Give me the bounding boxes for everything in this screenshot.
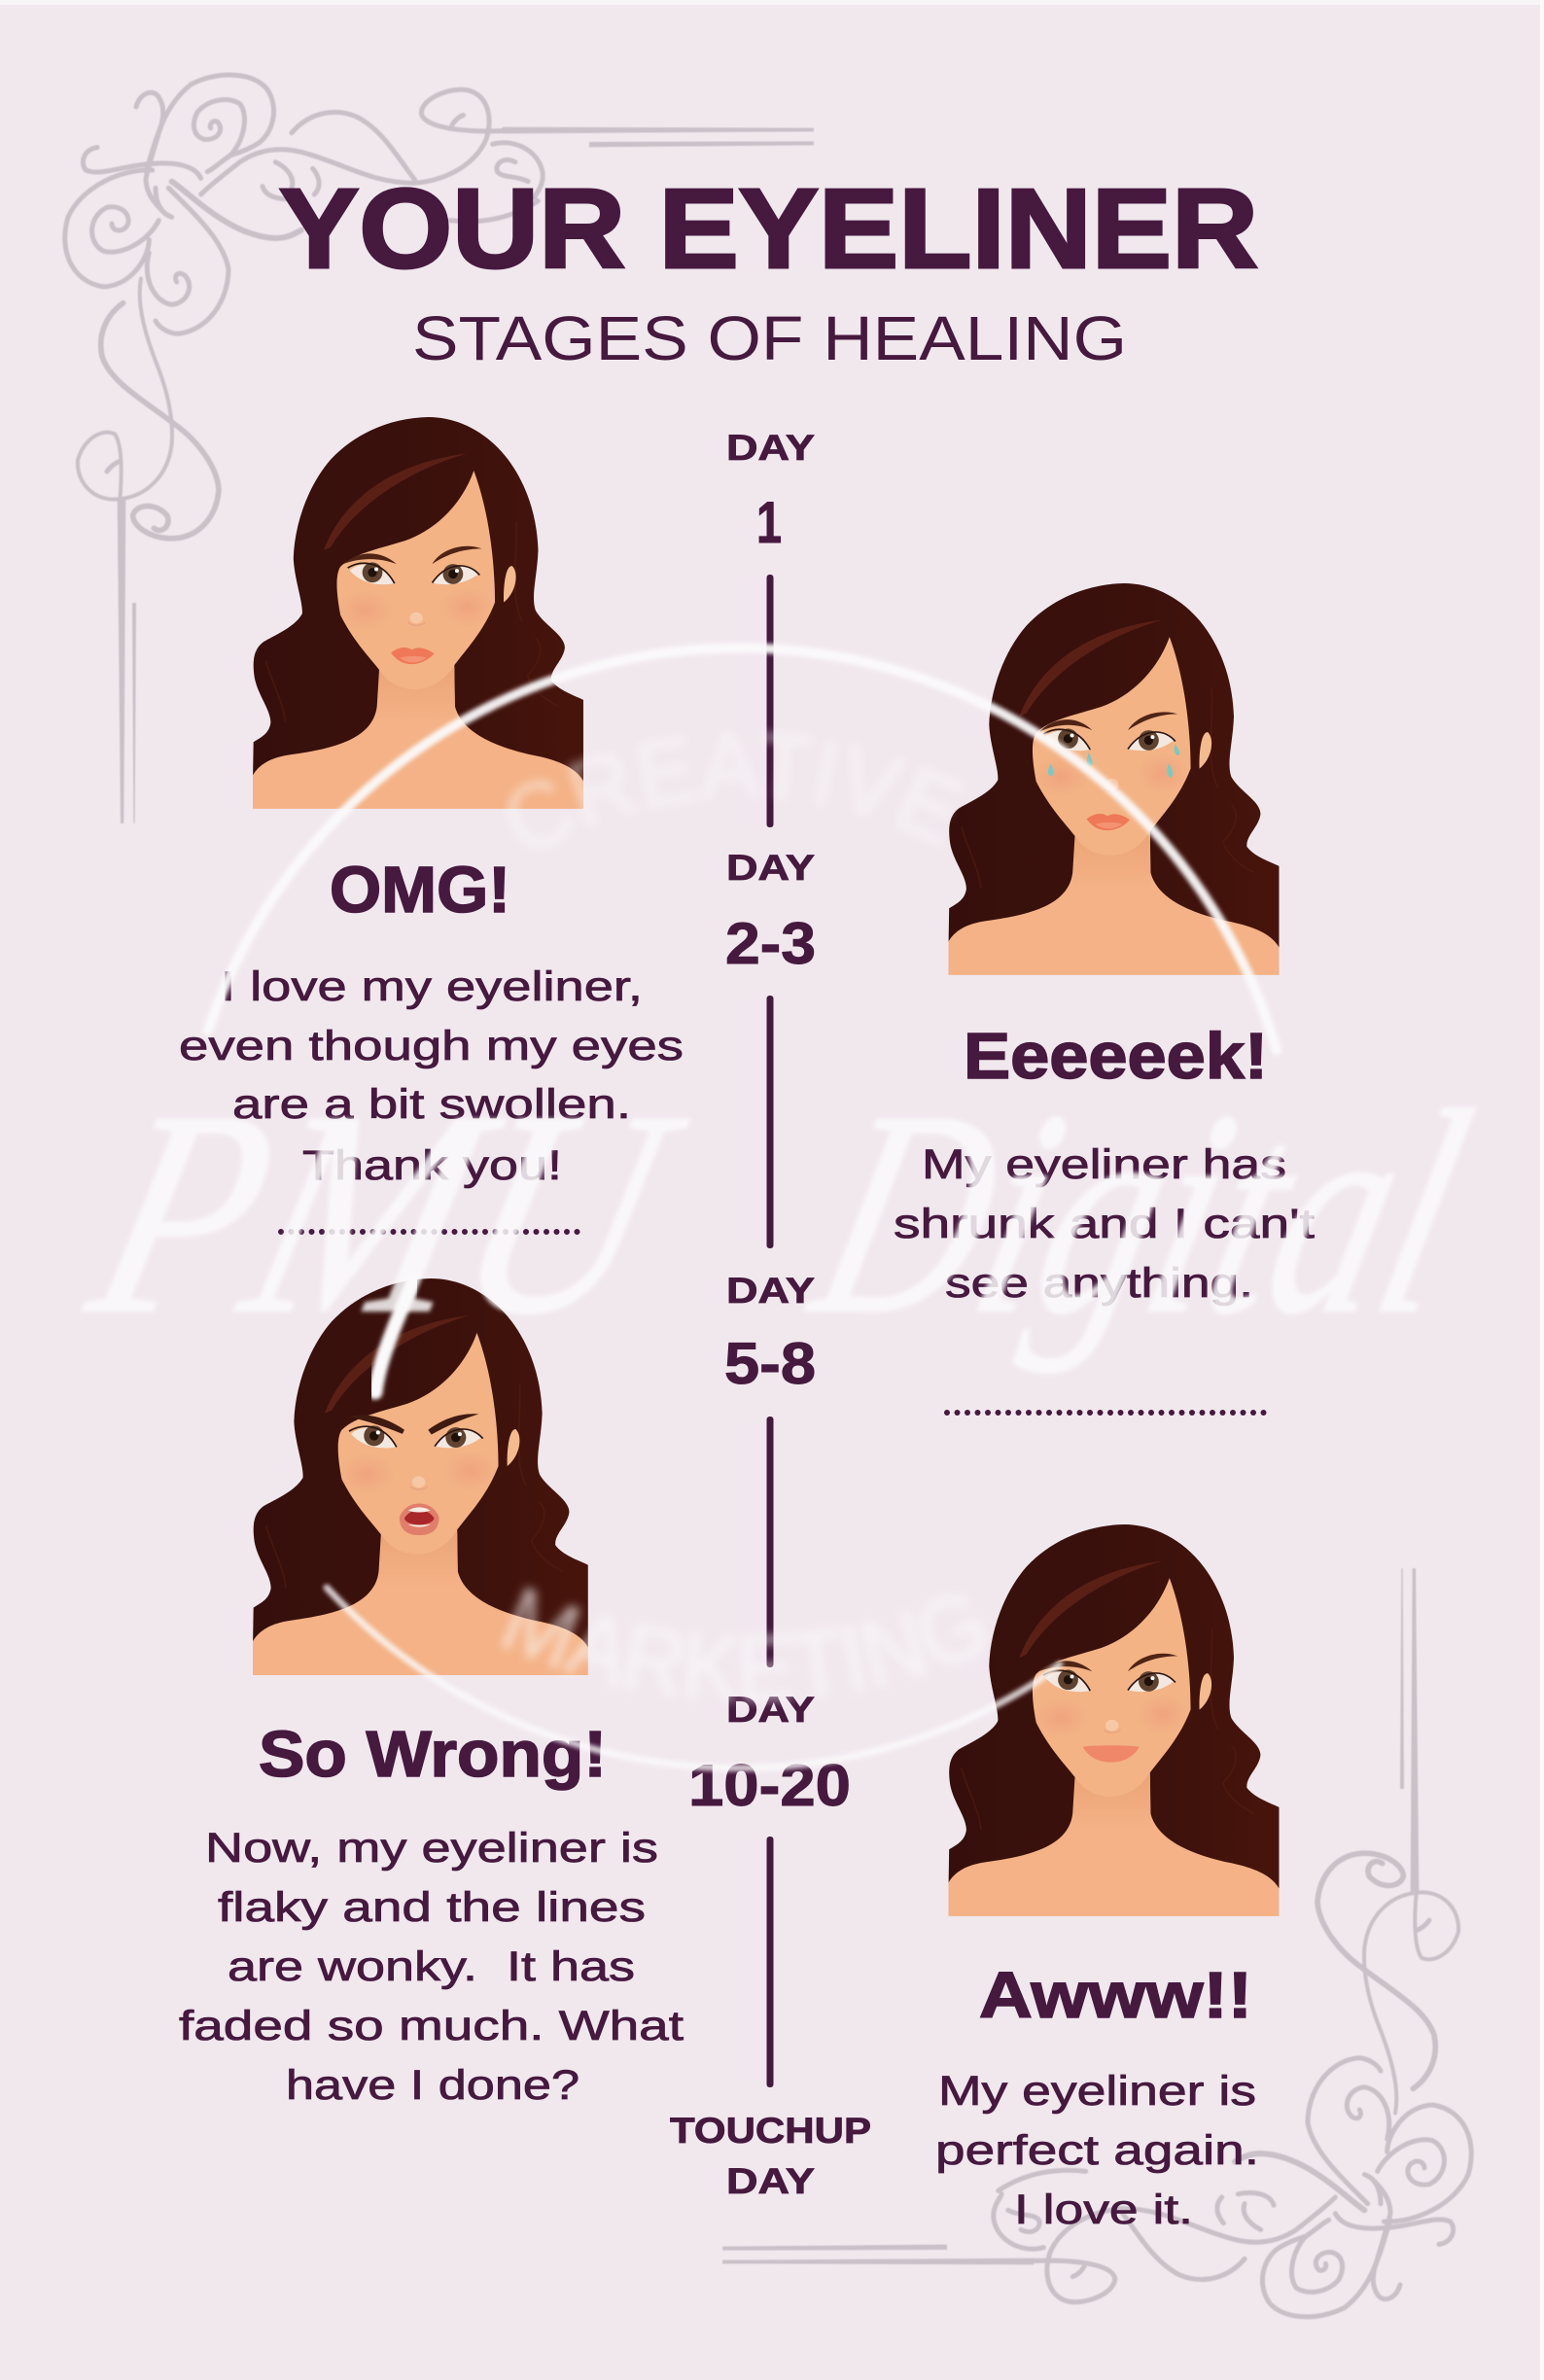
marker: day 1: DAY (726, 428, 815, 468)
text: Awww description: My eyeliner is (938, 2068, 1256, 2115)
title (279, 165, 1258, 373)
marker: day 2-3: DAY (726, 848, 815, 888)
text: So Wrong description: Now, my eyeliner is (205, 1825, 658, 1872)
watermark: white circular stamp (64, 640, 1494, 1775)
text: OMG description: even though my eyes (179, 1023, 684, 1069)
text: So Wrong description: faded so much. What (179, 2003, 684, 2049)
text: Eeeeeek description: My eyeliner has (922, 1141, 1286, 1188)
panel: OMG day 1 (179, 417, 684, 1232)
watermark word: creative: CREATIVE (504, 727, 955, 819)
marker: day 5-8: DAY (726, 1271, 815, 1311)
illustration: content woman portrait (949, 1524, 1279, 1916)
marker: day 2-3 (725, 848, 816, 1248)
watermark name: PMU (64, 1051, 708, 1374)
title: STAGES OF HEALING (412, 303, 1127, 373)
text: So Wrong description (179, 1825, 684, 2109)
illustration: angry woman portrait (253, 1278, 588, 1675)
title: YOUR EYELINER (279, 165, 1258, 292)
marker: day 1: 1 (756, 490, 782, 555)
marker: day 5-8 (724, 1271, 816, 1667)
marker: touchup day (670, 2111, 871, 2201)
watermark word: marketing (498, 1583, 920, 1708)
text: Awww description (935, 2068, 1259, 2233)
text: Eeeeeek description (894, 1141, 1315, 1307)
panel: So Wrong day 5-8 (179, 1278, 684, 2109)
text: Awww description: I love it. (1014, 2187, 1193, 2233)
text: OMG description (179, 963, 684, 1189)
text: So Wrong description: flaky and the lines (218, 1884, 646, 1931)
text: OMG description: I love my eyeliner, (221, 963, 643, 1010)
watermark ring: top arc (208, 648, 1277, 1050)
marker: day 1 (726, 428, 815, 827)
illustration: crying woman portrait (949, 583, 1279, 975)
marker: day 5-8: 5-8 (724, 1331, 816, 1396)
watermark word: creative (504, 727, 955, 819)
text: So Wrong description: have I done? (286, 2062, 579, 2109)
marker: day 10-20 (688, 1690, 851, 2087)
heading: Awww: Awww!! (979, 1959, 1252, 2032)
ornament: bottom right corner flourish (722, 1568, 1471, 2317)
text: Eeeeeek description: see anything. (945, 1260, 1253, 1307)
panel: Awww touchup (935, 1524, 1279, 2233)
heading: OMG: OMG! (330, 854, 510, 927)
watermark stroke across third portrait (375, 1281, 413, 1392)
text: OMG description: are a bit swollen. (232, 1081, 631, 1128)
panel: Eeeeeek day 2-3 (894, 583, 1315, 1413)
text: Awww description: perfect again. (935, 2127, 1259, 2174)
heading: Eeeeeek: Eeeeeek! (964, 1020, 1268, 1093)
marker: day 2-3: 2-3 (725, 911, 816, 976)
illustration: happy woman portrait (253, 417, 583, 809)
text: Eeeeeek description: shrunk and I can't (894, 1201, 1315, 1247)
marker: touchup day: DAY (726, 2161, 815, 2201)
text: So Wrong description: are wonky. It has (228, 1943, 635, 1990)
text: OMG description: Thank you! (302, 1142, 562, 1189)
marker: touchup day: TOUCHUP (670, 2111, 871, 2151)
heading: So Wrong: So Wrong! (259, 1718, 607, 1791)
timeline: central day markers (670, 428, 871, 2201)
watermark ring: bottom arc (327, 1588, 1060, 1768)
marker: day 10-20: 10-20 (688, 1753, 851, 1818)
watermark name (64, 1051, 1494, 1375)
marker: day 10-20: DAY (726, 1690, 815, 1730)
ornament: top left corner flourish (65, 75, 814, 823)
watermark word: marketing: MARKETING (498, 1583, 920, 1708)
